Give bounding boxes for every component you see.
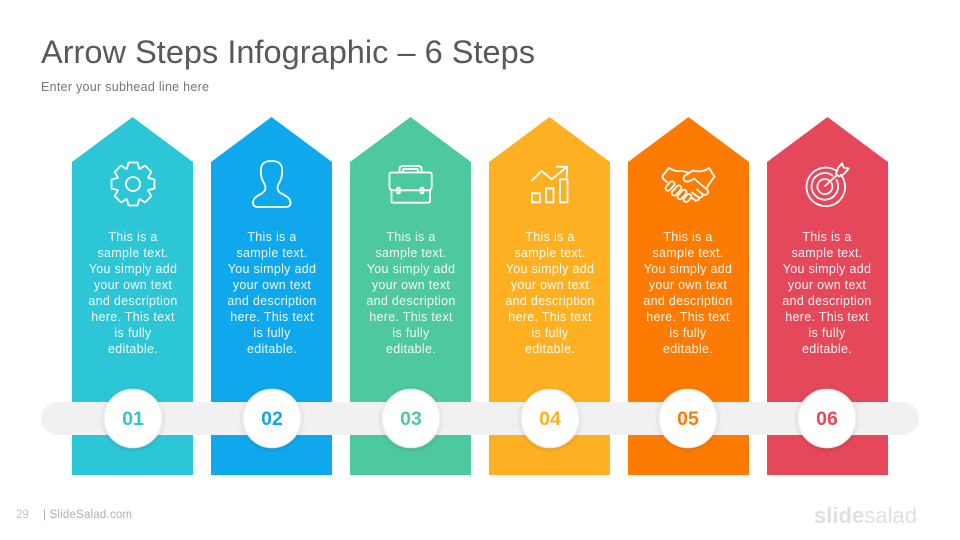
text block 4: and description — [505, 294, 595, 308]
marker 04: 04 — [539, 408, 561, 430]
text block 3 — [366, 230, 456, 356]
text block 3: You simply add — [367, 262, 455, 276]
text block 2: and description — [227, 294, 317, 308]
text block 5: editable. — [663, 342, 713, 356]
panel: step 2 — [211, 117, 332, 475]
marker 01 — [104, 390, 162, 448]
text block 2: is fully — [253, 326, 291, 340]
marker 03: 03 — [400, 408, 422, 430]
text block 6 — [782, 230, 872, 356]
text block 4: editable. — [525, 342, 575, 356]
text block 1: This is a — [108, 230, 158, 244]
text block 2: here. This text — [230, 310, 314, 324]
icon: gear — [112, 162, 154, 206]
text block 2: your own text — [233, 278, 311, 292]
subhead: Enter your subhead line here — [41, 80, 209, 94]
marker 02 — [243, 390, 301, 448]
text block 1: is fully — [114, 326, 152, 340]
text block 1: You simply add — [89, 262, 177, 276]
panel: step 4 — [489, 117, 610, 475]
logo: slidesalad: slidesalad — [814, 503, 917, 528]
text block 4 — [505, 230, 595, 356]
text block 1: editable. — [108, 342, 158, 356]
footer source: | SlideSalad.com — [43, 509, 132, 521]
panel: step 3 — [350, 117, 471, 475]
text block 5: is fully — [669, 326, 707, 340]
text block 5: This is a — [663, 230, 713, 244]
text block 1: sample text. — [98, 246, 168, 260]
marker 02: 02 — [261, 408, 283, 430]
text block 6: here. This text — [785, 310, 869, 324]
panel: step 6 — [767, 117, 888, 475]
text block 2: editable. — [247, 342, 297, 356]
text block 6: editable. — [802, 342, 852, 356]
text block 4: sample text. — [514, 246, 586, 260]
text block 5 — [643, 230, 733, 356]
icon: growth chart — [532, 167, 568, 202]
text block 6: This is a — [802, 230, 852, 244]
text block 6: You simply add — [783, 262, 871, 276]
text block 5: sample text. — [652, 246, 724, 260]
text block 3: is fully — [392, 326, 430, 340]
marker 06: 06 — [816, 408, 838, 430]
icon: handshake — [663, 168, 714, 203]
text block 4: here. This text — [508, 310, 592, 324]
text block 3: your own text — [372, 278, 450, 292]
arrow shape 5 — [628, 117, 749, 475]
text block 5: here. This text — [646, 310, 730, 324]
text block 6: your own text — [788, 278, 866, 292]
text block 1: here. This text — [91, 310, 175, 324]
text block 2: This is a — [247, 230, 297, 244]
arrow shape 1 — [72, 117, 193, 475]
marker 03 — [382, 390, 440, 448]
marker 01: 01 — [122, 408, 144, 430]
marker 05 — [659, 390, 717, 448]
arrow shape 4 — [489, 117, 610, 475]
icon: briefcase — [390, 166, 432, 203]
text block 6: is fully — [808, 326, 846, 340]
arrow shape 3 — [350, 117, 471, 475]
text block 1 — [88, 230, 178, 356]
text block 2 — [227, 230, 317, 356]
text block 1: and description — [88, 294, 178, 308]
text block 2: You simply add — [228, 262, 316, 276]
timeline track — [41, 402, 919, 435]
text block 6: and description — [782, 294, 872, 308]
marker 04 — [521, 390, 579, 448]
text block 4: is fully — [531, 326, 569, 340]
text block 1: your own text — [94, 278, 172, 292]
icon: target — [806, 163, 849, 206]
text block 4: your own text — [511, 278, 589, 292]
panel: step 5 — [628, 117, 749, 475]
title: Arrow Steps Infographic – 6 Steps — [41, 34, 535, 70]
panel: step 1 — [72, 117, 193, 475]
icon: person — [253, 161, 290, 207]
text block 3: sample text. — [376, 246, 446, 260]
arrow shape 2 — [211, 117, 332, 475]
text block 5: and description — [643, 294, 733, 308]
text block 5: You simply add — [644, 262, 732, 276]
text block 4: You simply add — [506, 262, 594, 276]
text block 4: This is a — [525, 230, 575, 244]
text block 2: sample text. — [236, 246, 308, 260]
arrow shape 6 — [767, 117, 888, 475]
marker 05: 05 — [677, 408, 699, 430]
text block 3: editable. — [386, 342, 436, 356]
text block 3: This is a — [386, 230, 436, 244]
text block 6: sample text. — [792, 246, 862, 260]
marker 06 — [798, 390, 856, 448]
text block 5: your own text — [649, 278, 727, 292]
text block 3: and description — [366, 294, 456, 308]
text block 3: here. This text — [369, 310, 453, 324]
page number: 29 — [16, 509, 29, 521]
